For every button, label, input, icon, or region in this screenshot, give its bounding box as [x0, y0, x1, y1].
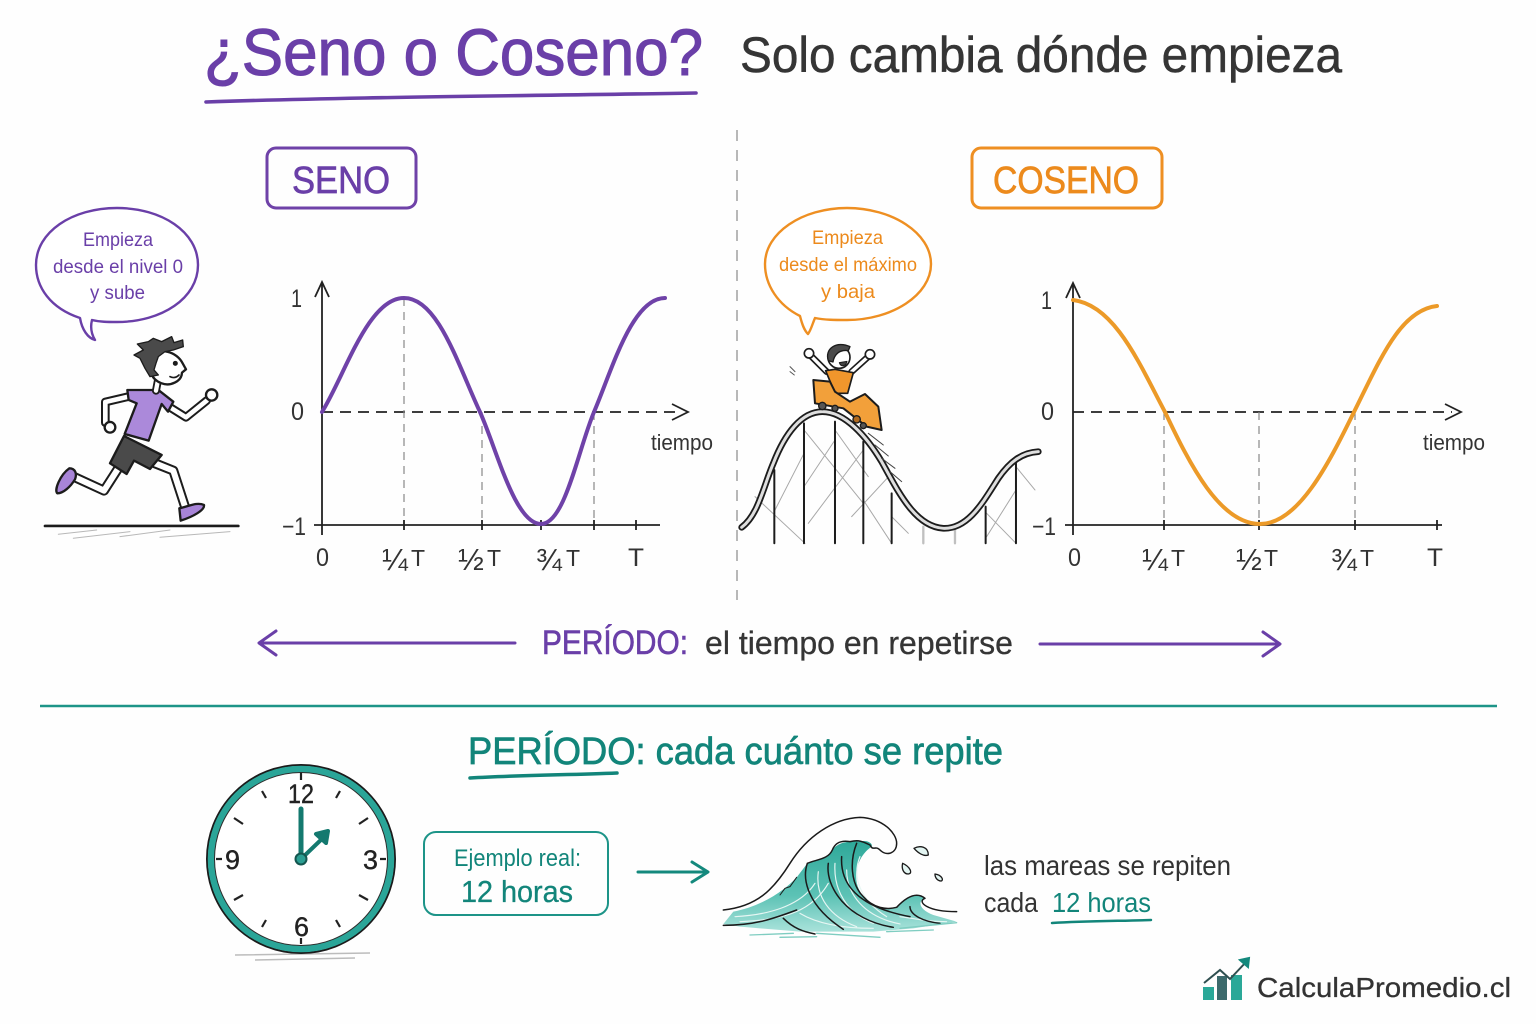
callout: ejemplo real: 12 horas	[461, 874, 573, 909]
coseno axis labels: T	[1360, 545, 1374, 571]
coseno axis labels: ¼	[1142, 542, 1169, 577]
seno axis labels: ¾	[536, 542, 563, 577]
coseno chart	[1065, 283, 1461, 535]
icon: running boy	[45, 337, 238, 538]
coseno axis labels: ½	[1236, 542, 1262, 577]
heading: período: PERÍODO: cada cuánto se repite	[468, 730, 1003, 773]
coseno axis labels: −1	[1032, 513, 1056, 541]
rider	[790, 345, 875, 393]
coseno axis labels: T	[1264, 545, 1278, 571]
panel: seno	[36, 148, 713, 577]
seno axis labels: T	[487, 545, 501, 571]
seno axis labels	[282, 285, 713, 577]
speech bubble: coseno	[765, 208, 931, 334]
seno axis labels: −1	[282, 513, 306, 541]
text: mareas: cada	[984, 887, 1038, 918]
speech bubble: coseno: y baja	[821, 281, 875, 303]
y axis	[1066, 283, 1080, 535]
center divider	[736, 130, 738, 600]
período span arrow: PERÍODO:	[542, 624, 688, 662]
text: mareas	[984, 850, 1231, 923]
seno axis labels: T	[411, 545, 425, 571]
x axis arrow	[322, 404, 688, 420]
title: ¿Seno o Coseno?	[204, 15, 703, 89]
icon: clock: 3	[363, 845, 378, 875]
arrow: to wave	[638, 862, 708, 882]
coseno axis labels: T	[1171, 545, 1185, 571]
logo: CalculaPromedio.cl	[1203, 958, 1511, 1003]
coseno axis labels: T	[1427, 544, 1443, 572]
seno axis labels: 1	[291, 285, 302, 313]
callout: ejemplo real: Ejemplo real:	[454, 845, 581, 872]
icon: clock: 12	[288, 779, 314, 809]
coseno label box	[972, 148, 1162, 208]
speech bubble: coseno: desde el máximo	[779, 254, 917, 276]
coseno axis labels: 0	[1068, 544, 1081, 572]
speech bubble: coseno: Empieza	[812, 227, 883, 249]
text: mareas: 12 horas	[1052, 887, 1151, 918]
icon: ocean wave	[723, 817, 957, 937]
icon: clock: 6	[294, 912, 309, 942]
y axis	[315, 282, 329, 535]
panel: coseno	[742, 148, 1485, 577]
seno axis labels: ¼	[382, 542, 409, 577]
coseno axis labels	[1032, 287, 1485, 577]
cosine curve	[1073, 300, 1437, 524]
title	[204, 15, 1342, 102]
seno label box: SENO	[292, 160, 390, 202]
sine curve	[322, 298, 665, 524]
x axis arrow	[1073, 404, 1461, 420]
seno axis labels: 0	[291, 398, 304, 426]
speech bubble: seno	[36, 208, 198, 340]
icon: clock	[207, 765, 395, 960]
seno axis labels: T	[628, 544, 644, 572]
coseno axis labels: 1	[1041, 287, 1052, 315]
speech bubble: seno: desde el nivel 0	[53, 256, 183, 278]
coseno axis labels: ¾	[1331, 542, 1358, 577]
período span arrow	[259, 624, 1280, 662]
text: mareas: las mareas se repiten	[984, 850, 1231, 881]
title: Solo cambia dónde empieza	[740, 27, 1342, 83]
período span arrow: el tiempo en repetirse	[705, 625, 1013, 661]
seno label box	[267, 148, 416, 208]
seno axis labels: tiempo	[651, 430, 713, 455]
seno axis labels: 0	[316, 544, 329, 572]
speech bubble: seno: Empieza	[83, 229, 153, 251]
coseno axis labels: tiempo	[1423, 430, 1485, 455]
seno axis labels: T	[566, 545, 580, 571]
callout: ejemplo real	[424, 832, 608, 915]
coseno axis labels: 0	[1041, 398, 1054, 426]
icon: roller coaster	[742, 345, 1038, 543]
coseno label box: COSENO	[993, 160, 1139, 202]
speech bubble: seno: y sube	[90, 282, 145, 304]
icon: clock: 9	[225, 845, 240, 875]
logo: CalculaPromedio.cl: CalculaPromedio.cl	[1257, 972, 1511, 1003]
section divider	[40, 705, 1497, 707]
seno axis labels: ½	[458, 542, 484, 577]
seno chart	[314, 282, 688, 535]
